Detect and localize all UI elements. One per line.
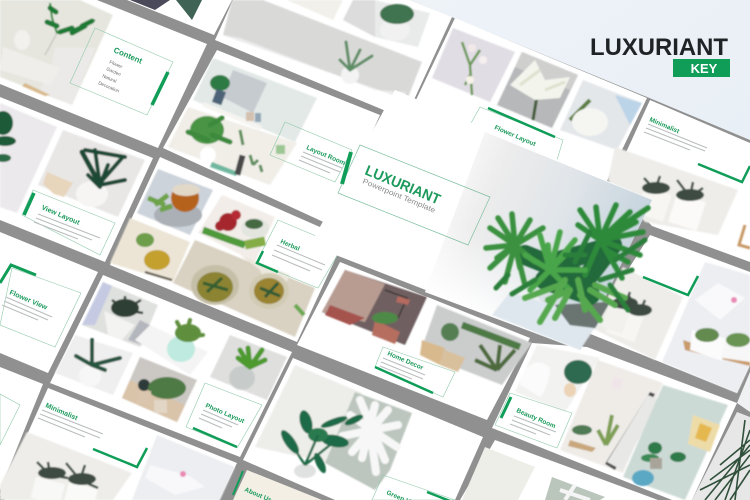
hero title: LUXURIANT (362, 163, 443, 208)
slide: minimalist lower (0, 388, 237, 500)
flower layout heading: Flower Layout (493, 124, 537, 148)
photo: wall shelf (193, 58, 317, 142)
slide: flower view (0, 232, 98, 373)
layout room heading: Layout Room (305, 144, 346, 167)
photo: sage wall with frame (623, 385, 728, 500)
content list: Decoration (98, 80, 120, 94)
content list: Garden (106, 66, 122, 77)
slide: view layout (0, 97, 153, 262)
slide: flower layout (415, 18, 647, 200)
green corner upper (698, 164, 750, 182)
photo: mint pot (135, 325, 208, 375)
layout room copy (299, 152, 342, 173)
photo: white flowers (325, 392, 412, 490)
hero bottom fade (425, 175, 580, 350)
photo: lamp and monstera (515, 345, 600, 412)
photo: plant shelf (420, 305, 532, 385)
slide: home decor (297, 262, 532, 420)
photo: bedroom with branch (0, 0, 113, 105)
photo: potted shrubs on wood (122, 357, 197, 422)
content box (70, 28, 173, 115)
content list: Flower (109, 59, 124, 69)
slide: herbal (110, 157, 345, 342)
photo: tea cup (137, 169, 213, 235)
home decor box (375, 347, 455, 397)
brand title: LUXURIANT (590, 34, 728, 61)
photo: mauve room (322, 270, 427, 345)
slide: far right palm photo (692, 372, 750, 500)
slide: layout room (163, 50, 380, 225)
green corner (93, 448, 147, 467)
green accent bar (152, 72, 168, 105)
green view bar (427, 492, 450, 500)
hero subtitle: Powerpoint Template (361, 177, 437, 215)
minimalist heading: Minimalist (44, 402, 79, 422)
home decor copy (380, 358, 425, 379)
photo layout copy (199, 410, 238, 428)
photo: succulent pots (592, 267, 683, 360)
photo: dark leaf pot (55, 335, 133, 395)
photo layout heading: Photo Layout (204, 402, 246, 425)
home decor heading: Home Decor (386, 350, 425, 372)
content heading: Content (112, 46, 144, 66)
content list: Natural (102, 73, 117, 84)
slide: minimalist duplicate right (588, 235, 750, 393)
photo: bright plant grey pot (210, 335, 287, 400)
hero box (338, 145, 490, 245)
flower view box (0, 268, 81, 347)
green corner lower (643, 276, 698, 295)
beauty room heading: Beauty Room (515, 407, 557, 430)
minimalist copy upper (644, 124, 707, 151)
flower view copy (2, 297, 52, 320)
photo: box and tray (662, 262, 750, 393)
key badge: KEY (691, 61, 718, 76)
photo: two succulents (0, 432, 132, 500)
photo: white blossom sky (560, 80, 642, 150)
photo: white pot on window (82, 282, 158, 347)
flower view heading: Flower View (8, 289, 49, 312)
slide: beauty room (492, 343, 737, 500)
minimalist heading upper: Minimalist (648, 116, 681, 136)
slide: left fragment (0, 367, 43, 490)
view layout copy (34, 214, 100, 240)
hero photo background (425, 132, 652, 350)
photo: shelf and snake plant (560, 360, 663, 473)
slide: top wall photo (215, 0, 452, 116)
herbal heading: Herbal (279, 238, 301, 253)
photo: pale wall with broad leaf plant (255, 365, 362, 463)
photo: book and bracelet (132, 435, 235, 500)
slide: green view (243, 358, 483, 500)
flower layout box (470, 107, 563, 160)
beauty room box (495, 393, 572, 448)
slide: bottom photos (460, 440, 658, 500)
content list (98, 59, 124, 94)
beauty room copy (510, 416, 556, 435)
slide: minimalist upper right (608, 100, 750, 262)
hero succulent plant (486, 205, 648, 322)
slide: about us (233, 470, 322, 500)
slide: content (0, 0, 207, 148)
minimalist copy (38, 410, 103, 438)
wooden tray fragment (739, 225, 750, 248)
view layout heading: View Layout (40, 204, 81, 227)
layout room box (270, 122, 352, 182)
photo: red berries (198, 195, 275, 262)
photo: oil bottles (110, 218, 190, 282)
photo: large leaf plant (0, 103, 57, 213)
slide: top leaf fragment (127, 0, 232, 35)
photo: shelf with ivy (168, 107, 297, 185)
herbal copy (272, 245, 325, 271)
photo: dark plant with pot (38, 130, 145, 217)
key badge (673, 59, 730, 77)
hero slide: Luxuriant (310, 90, 652, 350)
photo: purple blossoms (432, 28, 515, 102)
herbal box (256, 220, 342, 288)
photo: glass cups (173, 240, 315, 337)
slide: photo layout (50, 275, 292, 457)
photo: succulents in white pots (608, 147, 738, 235)
photo layout box (186, 383, 262, 448)
hero pot (492, 292, 600, 350)
green view box (372, 475, 455, 500)
photo: white lily (497, 52, 578, 128)
hero green bar (342, 152, 351, 184)
view layout box (22, 190, 115, 255)
